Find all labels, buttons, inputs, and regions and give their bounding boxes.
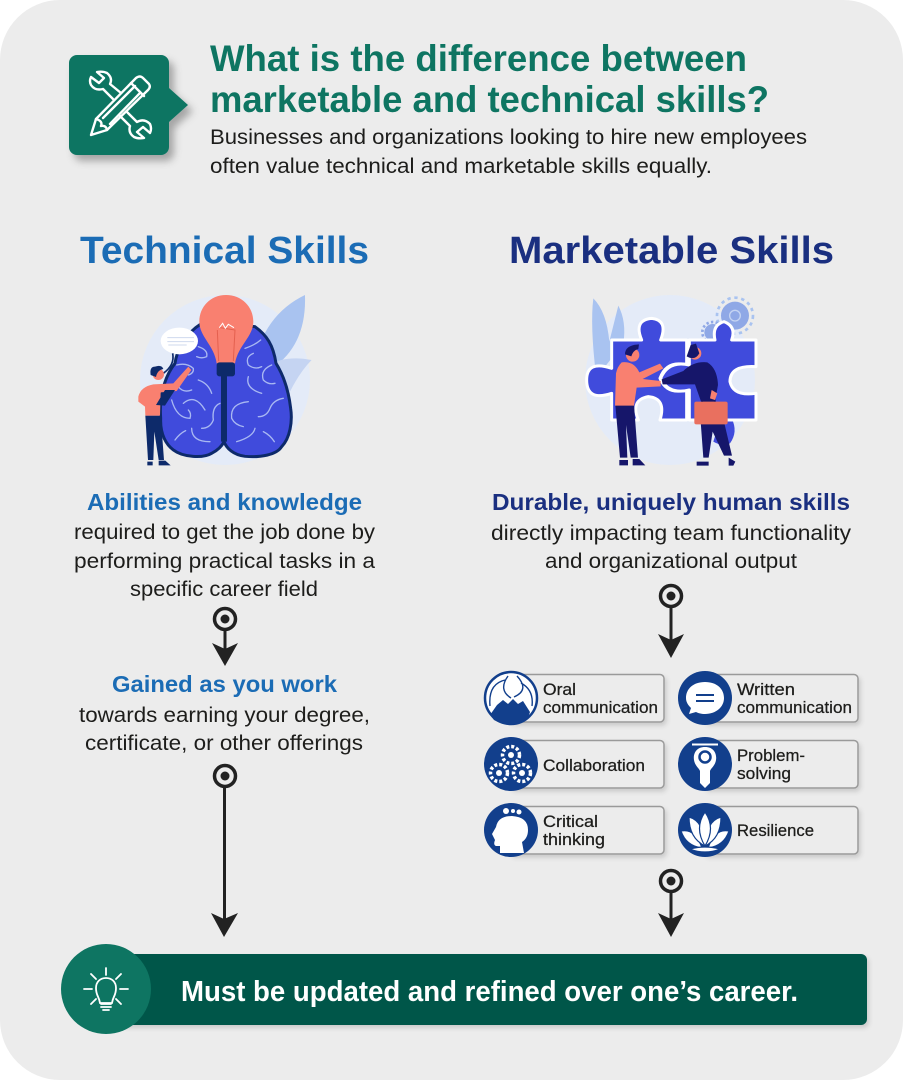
marketable description bbox=[491, 489, 852, 573]
skill: critical thinking: thinking bbox=[543, 831, 605, 849]
icon: light bulb bbox=[61, 944, 151, 1034]
technical gained text: certificate, or other offerings bbox=[85, 732, 363, 755]
skill: oral communication: Oral bbox=[543, 681, 576, 699]
arrow: technical step 2 bbox=[211, 766, 238, 937]
technical gained text: towards earning your degree, bbox=[79, 704, 370, 727]
title: marketable and technical skills? bbox=[210, 79, 769, 120]
heading: technical skills: Technical Skills bbox=[80, 230, 369, 272]
title: What is the difference between bbox=[210, 38, 747, 79]
skill: collaboration: Collaboration bbox=[543, 757, 645, 775]
skill: problem-solving: Problem- bbox=[737, 747, 805, 765]
intro text bbox=[210, 126, 807, 178]
intro text: often value technical and marketable skills equally. bbox=[210, 155, 712, 178]
skill: oral communication bbox=[485, 672, 664, 725]
skill: problem-solving: solving bbox=[737, 765, 791, 783]
technical gained text: Gained as you work bbox=[112, 671, 337, 697]
skill: problem-solving bbox=[678, 737, 858, 791]
technical description bbox=[74, 489, 376, 601]
conclusion banner bbox=[61, 944, 867, 1034]
technical description: specific career field bbox=[130, 578, 318, 601]
intro text: Businesses and organizations looking to hire new employees bbox=[210, 126, 807, 149]
arrow: technical step 1 bbox=[212, 608, 238, 666]
technical description: Abilities and knowledge bbox=[87, 489, 362, 515]
skill: critical thinking bbox=[484, 803, 664, 857]
technical description: performing practical tasks in a bbox=[74, 550, 375, 573]
marketable description: directly impacting team functionality bbox=[491, 522, 852, 545]
skill: oral communication: communication bbox=[543, 699, 658, 717]
skill: written communication: communication bbox=[737, 699, 852, 717]
arrow: marketable step 1 bbox=[658, 586, 684, 658]
technical description: required to get the job done by bbox=[74, 521, 376, 544]
skill: written communication: Written bbox=[737, 681, 795, 699]
arrow: marketable step 2 bbox=[658, 870, 684, 937]
skill: resilience bbox=[678, 803, 858, 857]
illustration: puzzle handshake bbox=[585, 295, 756, 466]
header icon: wrench and pencil bbox=[69, 55, 188, 155]
conclusion banner: Must be updated and refined over one’s career. bbox=[181, 976, 798, 1008]
illustration: brain with light bulb bbox=[138, 295, 312, 465]
technical gained text bbox=[79, 671, 370, 755]
skill: collaboration bbox=[484, 737, 664, 791]
skill: written communication bbox=[678, 671, 858, 725]
skill: resilience: Resilience bbox=[737, 822, 814, 840]
skill: critical thinking: Critical bbox=[543, 813, 598, 831]
marketable description: and organizational output bbox=[545, 550, 797, 573]
marketable description: Durable, uniquely human skills bbox=[492, 489, 850, 515]
title bbox=[210, 38, 769, 120]
heading: marketable skills: Marketable Skills bbox=[509, 230, 834, 272]
